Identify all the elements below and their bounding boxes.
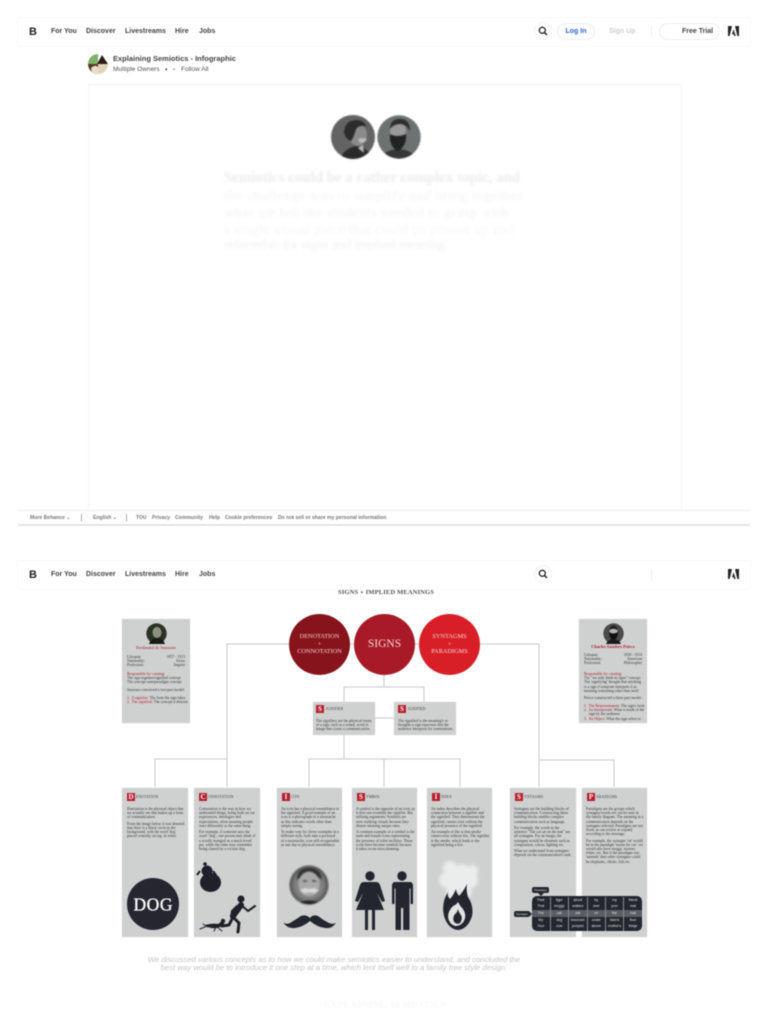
nav link: Jobs: Jobs	[199, 28, 215, 35]
letter box: P	[589, 793, 593, 801]
title: YNTAGMS	[524, 795, 543, 799]
title: ONNOTATION	[208, 795, 234, 799]
letter box: S	[400, 705, 404, 713]
infographic heading: SIGNS + IMPLIED MEANINGS	[338, 589, 434, 596]
body text: An index describes the physical connection between a signifier and the signified. They demonstrate the signified, cannot exist without the physical presence of the signified.	[431, 807, 485, 828]
footer link: TOU: TOU	[136, 515, 147, 521]
letter box: I	[285, 793, 287, 801]
column 6: mat	[630, 904, 636, 908]
panel: signifier	[313, 702, 375, 735]
portrait: Saussure	[146, 622, 168, 645]
footer divider	[81, 514, 82, 521]
body text: A common example of a symbol is the male and female icons representing the presence of toilet facilities. These icons have become symbols because it takes on an extra meaning.	[356, 830, 415, 851]
letter box: I	[435, 793, 437, 801]
faint closing heading: EXPLAINING SEMIOTICS	[323, 1000, 447, 1011]
column 3: walked	[572, 904, 583, 908]
column 3: about	[573, 898, 582, 902]
column 5: Sam's	[610, 918, 619, 922]
icon: moustache	[283, 915, 336, 928]
portrait: Ferdinand de Saussure	[330, 114, 376, 160]
model list: 1. A signifier: The form the sign takes 2. The signified: The concept it denotes	[127, 696, 188, 704]
body text	[514, 806, 572, 858]
column 6: floor	[630, 918, 636, 922]
footer link: cookie preferences: Cookie preferences	[225, 515, 272, 521]
column 5: my	[612, 898, 617, 902]
nav link: Discover: Discover	[86, 28, 116, 35]
heading: connotation	[198, 792, 234, 802]
nav link: Hire: Hire	[175, 571, 189, 578]
project title: Explaining Semiotics - Infographic	[113, 54, 236, 63]
title: IGNIFIER	[326, 707, 343, 711]
title: ENOTATION	[136, 795, 158, 799]
column 1: My	[538, 918, 543, 922]
main content panel outline	[88, 84, 682, 511]
icon: DOG circle	[127, 878, 179, 930]
facts labels: Lifespan: Nationality: Profession:	[127, 655, 145, 667]
model list: 1. The Representamen: The sign's form 2. An Interpretant: What is made of the sign by the audience 3. An Object: What the sign refers to	[584, 704, 645, 721]
caption: We discussed various concepts as to how we could make semiotics easier to understand, and concluded the best way would be to introduce it one step at a time, which lent itself well to a family tree style design.	[148, 955, 520, 972]
column 4	[588, 896, 606, 932]
body text: Syntagms are the building blocks of communication. Constructing these building blocks enables complex communication such as language.	[514, 807, 569, 824]
pointer: syntagm	[529, 912, 532, 916]
column 4: under	[592, 918, 601, 922]
circle: denotation + connotation: DENOTATION	[300, 633, 339, 640]
column 2: moggy	[554, 904, 564, 908]
column 4: by	[594, 898, 598, 902]
heading: symbol	[356, 792, 380, 802]
column 6: mat	[630, 911, 636, 915]
panel: connotation	[194, 788, 260, 937]
Behance logo: B	[29, 26, 37, 38]
column 5: your	[611, 904, 618, 908]
letter box	[432, 793, 440, 801]
column 2: tiger	[556, 898, 563, 902]
responsible for: Responsible for creating: The sign together/signified concept The concept seen/paradigm concept	[127, 672, 182, 684]
follow all link: Follow All	[181, 66, 208, 73]
title: NDEX	[441, 795, 452, 799]
Behance logo: B	[29, 569, 37, 581]
column 1: That	[537, 904, 544, 908]
footer bar	[18, 510, 750, 526]
nav link: For You: For You	[51, 571, 77, 578]
button: free trial: Free Trial	[682, 28, 713, 35]
column 3: bounced	[571, 918, 584, 922]
model intro: Peirce constructed a three-part model:	[584, 696, 642, 700]
column 6	[628, 898, 638, 928]
nav link: Discover: Discover	[86, 571, 116, 578]
body text: The signified is the meaning/s or thoughts a sign expresses that the audience interprets for connotations.	[398, 719, 453, 731]
name: Ferdinand de Saussure	[136, 645, 176, 650]
portrait: Charles Sanders Peirce	[376, 114, 422, 160]
body text: Denotation is the physical object that we actually see that makes up a form of communication.	[127, 807, 183, 819]
column 4: over	[593, 904, 600, 908]
title: IGNIFIED	[408, 707, 426, 711]
owners dropdown marker: ▾ •	[165, 67, 175, 73]
icon: running small dog	[200, 919, 225, 931]
body text: A symbol is the opposite of an icon, as it does not resemble the signifier. But utilising arguments/ Symbols are seen studying visuals because they denote meaning unique ones.	[356, 807, 415, 828]
column 1: Your	[537, 924, 544, 928]
column 4: on	[594, 911, 598, 915]
facts labels: Lifespan: Nationality: Profession:	[584, 653, 602, 665]
letter box	[398, 705, 406, 713]
divider	[651, 569, 652, 581]
button: sign up: Sign Up	[609, 28, 635, 35]
body text: To make way for clever examples in a different style, both take a portrayal of a moustache; icon still recognisable as one due to physical resemblance.	[281, 830, 339, 847]
letter box	[515, 793, 523, 801]
syntagm and paradigm table	[513, 886, 643, 932]
heading: paradigms	[586, 792, 618, 802]
top navigation bar	[18, 18, 750, 46]
icon: search	[536, 566, 550, 582]
icon: portrait of moustached man	[290, 866, 328, 905]
panel: symbol	[352, 788, 417, 937]
label: paradigm	[532, 887, 549, 893]
circle: denotation + connotation: +	[318, 640, 321, 648]
letter box	[316, 705, 324, 713]
footer link: More Behance: More Behance ⌄	[30, 515, 71, 521]
faint intro paragraph	[224, 170, 522, 253]
portrait: Peirce	[602, 622, 624, 645]
body text: From the image below it was denoted that there is a black circle in the background, with the word 'dog' placed centrally on top, in white.	[127, 822, 184, 838]
icon: Adobe logo	[727, 568, 740, 580]
panel: icon	[277, 788, 342, 937]
footer link: Privacy: Privacy	[152, 515, 170, 521]
body text	[126, 806, 185, 838]
title: ARADIGMS	[596, 795, 617, 799]
owner avatar	[87, 53, 108, 74]
body text	[430, 806, 490, 848]
icon: female toilet figure	[355, 871, 385, 930]
second navigation bar	[18, 561, 750, 589]
button: log in: Log In	[566, 28, 586, 35]
name: Charles Sanders Peirce	[591, 644, 635, 649]
body text: An icon has a physical resemblance to the signified. A good example of an icon is a photograph of a moustache as this indicates words other than simply seeing.	[281, 807, 339, 828]
footer link: Help: Help	[209, 515, 220, 521]
heading: denotation	[126, 792, 158, 802]
letter box	[199, 793, 207, 801]
icon: search	[536, 23, 550, 39]
circle: denotation + connotation	[289, 614, 350, 675]
label: syntagm: Syntagm	[516, 912, 528, 916]
nav link: Jobs: Jobs	[199, 571, 215, 578]
circle: signs	[354, 614, 415, 675]
letter box: S	[517, 793, 521, 801]
responsible for: Responsible for creating: The "we only think in signs" concept The 'signifying' thought that anything is a sign if someone interprets it as meaning something other than itself	[584, 672, 641, 693]
icon: male toilet figure	[392, 871, 413, 930]
model intro: Saussure conceived a two-part model:	[127, 688, 185, 692]
letter box: D	[128, 793, 134, 801]
column 2: dog	[556, 918, 562, 922]
label: syntagm	[514, 911, 530, 917]
panel: denotation	[122, 788, 188, 937]
body text: The signifiers are the physical forms of a sign, such as a sound, word or image that create a communication.	[316, 719, 372, 731]
body text: For example, the words in the sentence "The cat sat on the mat" are all syntagms. For an image, the syntagms would be elements such as composition, colour, lighting etc.	[514, 826, 570, 847]
title: YMBOL	[366, 795, 380, 799]
card illustrations	[126, 860, 479, 934]
faint intro paragraph: Semiotics could be a rather complex topic, and	[224, 170, 521, 186]
icon: running person	[222, 896, 255, 932]
label: paradigm: Paradigm	[534, 888, 547, 892]
body text: For example, the syntagm 'cat' would be in the paradigm 'nouns for cat': we would also have moggy, mouser, feline, etc. But if the paradigm was 'animals' then other syntagms could be elephants, chicks, fish etc.	[586, 839, 643, 864]
panel: Ferdinand de Saussure	[122, 619, 190, 723]
body text	[356, 806, 415, 852]
circle: denotation + connotation: CONNOTATION	[297, 648, 342, 655]
body text: Connotation is the way in how we understand things, being built on our experiences, ideologies and expectations, often meaning people react differently to the same thing.	[199, 807, 255, 828]
column 2: cow	[556, 924, 562, 928]
circle: syntagms + paradigms: +	[448, 640, 451, 648]
project header	[87, 53, 236, 74]
footer link: English: English ⌄	[93, 515, 117, 521]
button: free trial	[659, 23, 720, 40]
panel: syntagms	[510, 788, 576, 937]
title: CON	[291, 795, 299, 799]
heading: icon	[281, 792, 300, 802]
column 2: cat	[557, 911, 562, 915]
letter box	[357, 793, 365, 801]
button: log in	[557, 23, 595, 40]
column 4: above	[591, 924, 601, 928]
heading: syntagms	[514, 792, 544, 802]
circle: signs: SIGNS	[368, 638, 401, 650]
icon: flame	[443, 884, 472, 930]
divider	[651, 26, 652, 36]
letter box: C	[200, 793, 206, 801]
column 1: Their	[537, 898, 545, 902]
letter box	[282, 793, 290, 801]
column 5	[606, 896, 624, 932]
column 6: friend	[629, 898, 637, 902]
faint intro paragraph: what we felt the students needed to grasp with	[224, 206, 508, 221]
letter box	[127, 793, 135, 801]
body text: For example, if someone says the word "dog", one person may think of a scruffy mongrel as a much loved pet, while the other may remember being chased by a vicious dog.	[199, 830, 255, 851]
circle: syntagms + paradigms: PARADIGMS	[431, 648, 468, 655]
panel: signified	[394, 702, 456, 735]
word grid	[532, 896, 642, 931]
owners line: Multiple Owners	[113, 66, 160, 73]
letter box: S	[359, 793, 363, 801]
heading: index	[431, 792, 452, 802]
facts values: 1857 - 1913 Swiss linguist	[167, 655, 185, 667]
footer link: Community: Community	[175, 515, 203, 521]
heading: signified	[397, 704, 426, 714]
nav link: For You: For You	[51, 28, 77, 35]
nav link: Livestreams: Livestreams	[125, 571, 166, 578]
icon: Adobe logo	[727, 25, 740, 37]
faint intro paragraph: referred to for signs and implied meaning.	[224, 238, 448, 253]
panel: Charles Sanders Peirce	[579, 619, 647, 723]
panel: index	[427, 788, 492, 937]
nav link: Hire: Hire	[175, 28, 189, 35]
column 3: jumped	[572, 924, 583, 928]
letter box	[587, 793, 595, 801]
pointer: paradigm	[538, 892, 544, 896]
circle: syntagms + paradigms	[419, 614, 480, 675]
facts values: 1839 - 1914 American Philosopher	[624, 653, 642, 665]
circle: syntagms + paradigms: SYNTAGMS	[432, 633, 467, 640]
column 6: fridge	[629, 924, 637, 928]
body text: What we understand from syntagms depends on the communication's task.	[514, 849, 572, 857]
footer link: personal information: Do not sell or share my personal information	[278, 515, 386, 521]
heading: signifier	[315, 704, 344, 714]
panel: paradigms	[582, 788, 647, 937]
icon: smoke	[439, 861, 478, 898]
column 1: The	[538, 911, 544, 915]
column 5: the	[612, 911, 617, 915]
letter box: S	[318, 705, 322, 713]
column 2	[550, 896, 569, 932]
nav link: Livestreams: Livestreams	[125, 28, 166, 35]
faint intro paragraph: the challenge was to simplify and bring together	[224, 189, 522, 204]
portraits: Saussure and Peirce	[330, 114, 422, 160]
column 3	[569, 896, 588, 932]
icon: sitting dog	[197, 862, 221, 892]
body text: Paradigms are the groups which syntagms/words are can be seen in the family diagram. The meaning in a communication depends on the syntagms selected. Paradigms are not fixed, as can evolve or expand according to the message.	[586, 807, 643, 836]
body text: An example of this is that smoke cannot exist without fire. The signifier is the smoke, which leads to the signified being a fire.	[431, 830, 489, 847]
icon: DOG circle: DOG	[134, 894, 173, 914]
body text	[198, 806, 256, 852]
body text	[280, 806, 340, 848]
faint intro paragraph: a single visual piece that could be pinned up and	[224, 223, 514, 238]
column 5: mother's	[608, 924, 621, 928]
body text	[586, 806, 644, 864]
footer divider	[126, 514, 127, 521]
column 1	[532, 896, 550, 932]
column 3: sat	[575, 911, 580, 915]
highlighted row	[532, 910, 642, 917]
